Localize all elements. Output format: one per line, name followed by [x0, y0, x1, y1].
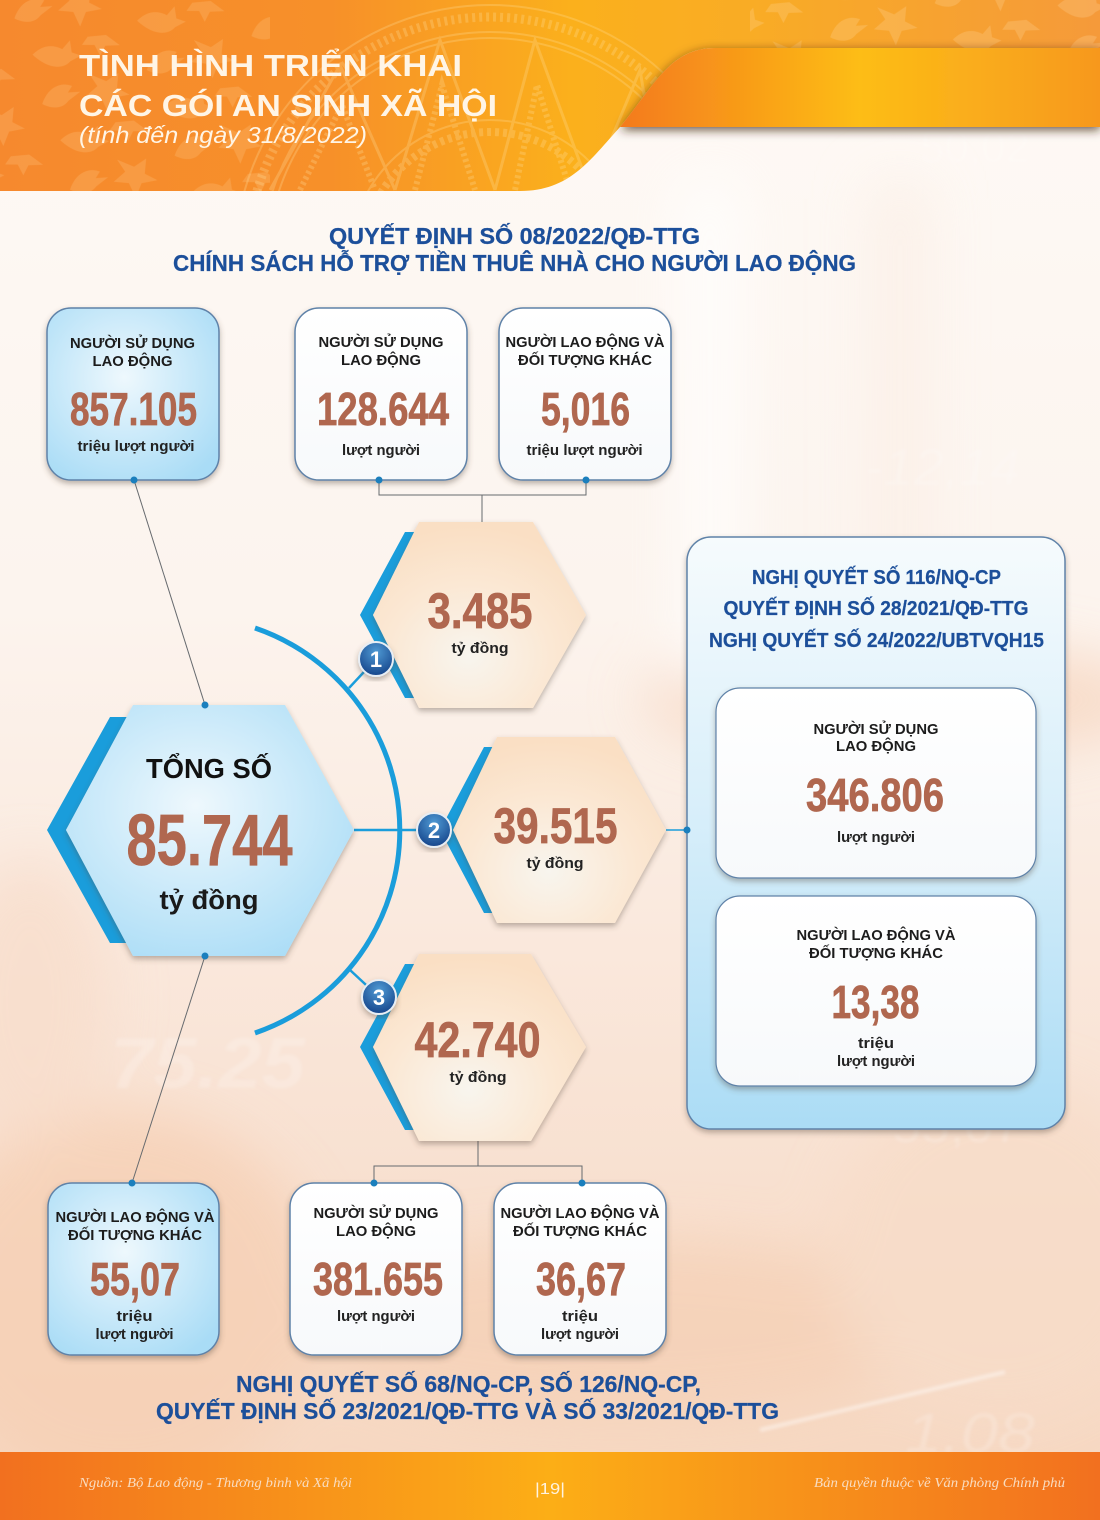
card: workers, package 1: triệu lượt người	[526, 442, 642, 459]
card: employers, package 2: 346.806	[806, 769, 944, 821]
badge 2	[417, 813, 451, 847]
badge 2: 2	[428, 818, 440, 843]
card: workers, total: triệu	[116, 1308, 152, 1325]
footer	[0, 1452, 1100, 1520]
card: workers, package 3: ĐỐI TƯỢNG KHÁC	[513, 1222, 647, 1240]
card: workers, package 3: 36,67	[536, 1253, 626, 1305]
card: workers, package 3	[494, 1183, 666, 1355]
hexagon: package 3: tỷ đồng	[450, 1069, 506, 1086]
hexagon: total: 85.744	[126, 801, 292, 881]
card: employers, total: triệu lượt người	[78, 438, 194, 455]
card: workers, total: NGƯỜI LAO ĐỘNG VÀ	[56, 1208, 215, 1226]
heading: housing support decision: QUYẾT ĐỊNH SỐ 08/2022/QĐ-TTG	[329, 222, 700, 249]
card: employers, package 1: NGƯỜI SỬ DỤNG	[318, 333, 444, 351]
card: workers, package 1	[499, 308, 671, 480]
card: workers, package 1: NGƯỜI LAO ĐỘNG VÀ	[506, 333, 665, 351]
panel: package 2 details	[687, 537, 1065, 1129]
card: employers, package 1	[295, 308, 467, 480]
title	[79, 48, 497, 148]
connector lines	[132, 480, 586, 1183]
badge 3: 3	[373, 985, 385, 1010]
title: TÌNH HÌNH TRIỂN KHAI	[79, 48, 462, 83]
footer: Nguồn: Bộ Lao động - Thương binh và Xã hội	[78, 1476, 352, 1491]
card: workers, package 2	[716, 896, 1036, 1086]
title: CÁC GÓI AN SINH XÃ HỘI	[79, 87, 497, 123]
card: employers, package 3: 381.655	[313, 1253, 443, 1305]
hexagon: total: TỔNG SỐ	[146, 752, 272, 784]
hexagon: package 1	[360, 522, 586, 708]
card: employers, package 2: lượt người	[837, 829, 915, 846]
card: employers, package 3: LAO ĐỘNG	[336, 1222, 416, 1240]
heading: package 3 resolutions: QUYẾT ĐỊNH SỐ 23/2021/QĐ-TTG VÀ SỐ 33/2021/QĐ-TTG	[156, 1397, 779, 1424]
card: workers, package 2: NGƯỜI LAO ĐỘNG VÀ	[796, 926, 956, 944]
footer: Bản quyền thuộc về Văn phòng Chính phủ	[814, 1476, 1065, 1491]
card: workers, package 1: ĐỐI TƯỢNG KHÁC	[518, 351, 652, 369]
card: employers, package 3	[290, 1183, 462, 1355]
hexagon: package 2: tỷ đồng	[526, 855, 584, 872]
arc and branches	[255, 628, 687, 1033]
card: employers, package 2	[716, 688, 1036, 878]
panel heading: NGHỊ QUYẾT SỐ 116/NQ-CP	[752, 565, 1001, 589]
card: workers, total: 55,07	[90, 1253, 180, 1305]
hexagon: package 2: 39.515	[494, 798, 618, 854]
card: workers, package 2: triệu	[858, 1035, 894, 1052]
card: workers, package 3: triệu	[562, 1308, 598, 1325]
hexagon: package 2	[440, 737, 666, 923]
card: employers, package 2: NGƯỜI SỬ DỤNG	[814, 720, 938, 738]
heading: housing support decision	[173, 222, 856, 276]
card: employers, package 2: LAO ĐỘNG	[836, 737, 916, 755]
title: (tính đến ngày 31/8/2022)	[79, 122, 367, 148]
card: employers, package 1: LAO ĐỘNG	[341, 351, 421, 369]
card: employers, package 3: NGƯỜI SỬ DỤNG	[314, 1204, 438, 1222]
card: employers, total: NGƯỜI SỬ DỤNG	[70, 334, 195, 352]
page background: 75.25	[110, 1024, 306, 1104]
hexagon: package 3: 42.740	[414, 1012, 540, 1068]
header gold band	[620, 48, 1100, 127]
panel heading	[709, 565, 1044, 652]
card: workers, package 2: 13,38	[832, 976, 920, 1028]
hexagon: package 3	[360, 954, 586, 1141]
card: workers, package 3: NGƯỜI LAO ĐỘNG VÀ	[500, 1204, 660, 1222]
panel heading: NGHỊ QUYẾT SỐ 24/2022/UBTVQH15	[709, 628, 1044, 652]
card: workers, total: ĐỐI TƯỢNG KHÁC	[68, 1226, 202, 1244]
page background: -12,14	[865, 439, 1020, 497]
card: employers, total: 857.105	[70, 383, 197, 435]
page background: 50,02	[920, 123, 1030, 172]
connector dots	[128, 476, 690, 1186]
badge 1: 1	[370, 647, 382, 672]
hexagon: package 1: 3.485	[428, 583, 532, 639]
card: workers, package 2: lượt người	[837, 1053, 915, 1070]
card: workers, package 3: lượt người	[541, 1326, 619, 1343]
page background: 55,07	[892, 1100, 1022, 1152]
card: employers, package 1: lượt người	[342, 442, 420, 459]
hexagon: total	[47, 705, 354, 956]
heading: package 3 resolutions	[156, 1370, 779, 1424]
heading: package 3 resolutions: NGHỊ QUYẾT SỐ 68/NQ-CP, SỐ 126/NQ-CP,	[236, 1370, 701, 1397]
card: workers, package 1: 5,016	[541, 383, 630, 435]
card: employers, package 3: lượt người	[337, 1308, 415, 1325]
card: employers, total	[47, 308, 219, 480]
header banner	[0, 0, 1100, 191]
hexagon: package 1: tỷ đồng	[452, 640, 508, 657]
card: workers, total	[48, 1183, 219, 1355]
card: workers, total: lượt người	[96, 1326, 174, 1343]
page background: 1.08	[905, 1401, 1035, 1464]
heading: housing support decision: CHÍNH SÁCH HỖ TRỢ TIỀN THUÊ NHÀ CHO NGƯỜI LAO ĐỘNG	[173, 248, 856, 276]
badge 3	[362, 980, 396, 1014]
panel heading: QUYẾT ĐỊNH SỐ 28/2021/QĐ-TTG	[724, 596, 1028, 620]
card: workers, package 2: ĐỐI TƯỢNG KHÁC	[809, 944, 943, 962]
card: employers, total: LAO ĐỘNG	[92, 352, 172, 370]
hexagon: total: tỷ đồng	[160, 885, 258, 915]
footer: |19|	[535, 1481, 565, 1498]
badge 1	[359, 642, 393, 676]
card: employers, package 1: 128.644	[317, 383, 449, 435]
